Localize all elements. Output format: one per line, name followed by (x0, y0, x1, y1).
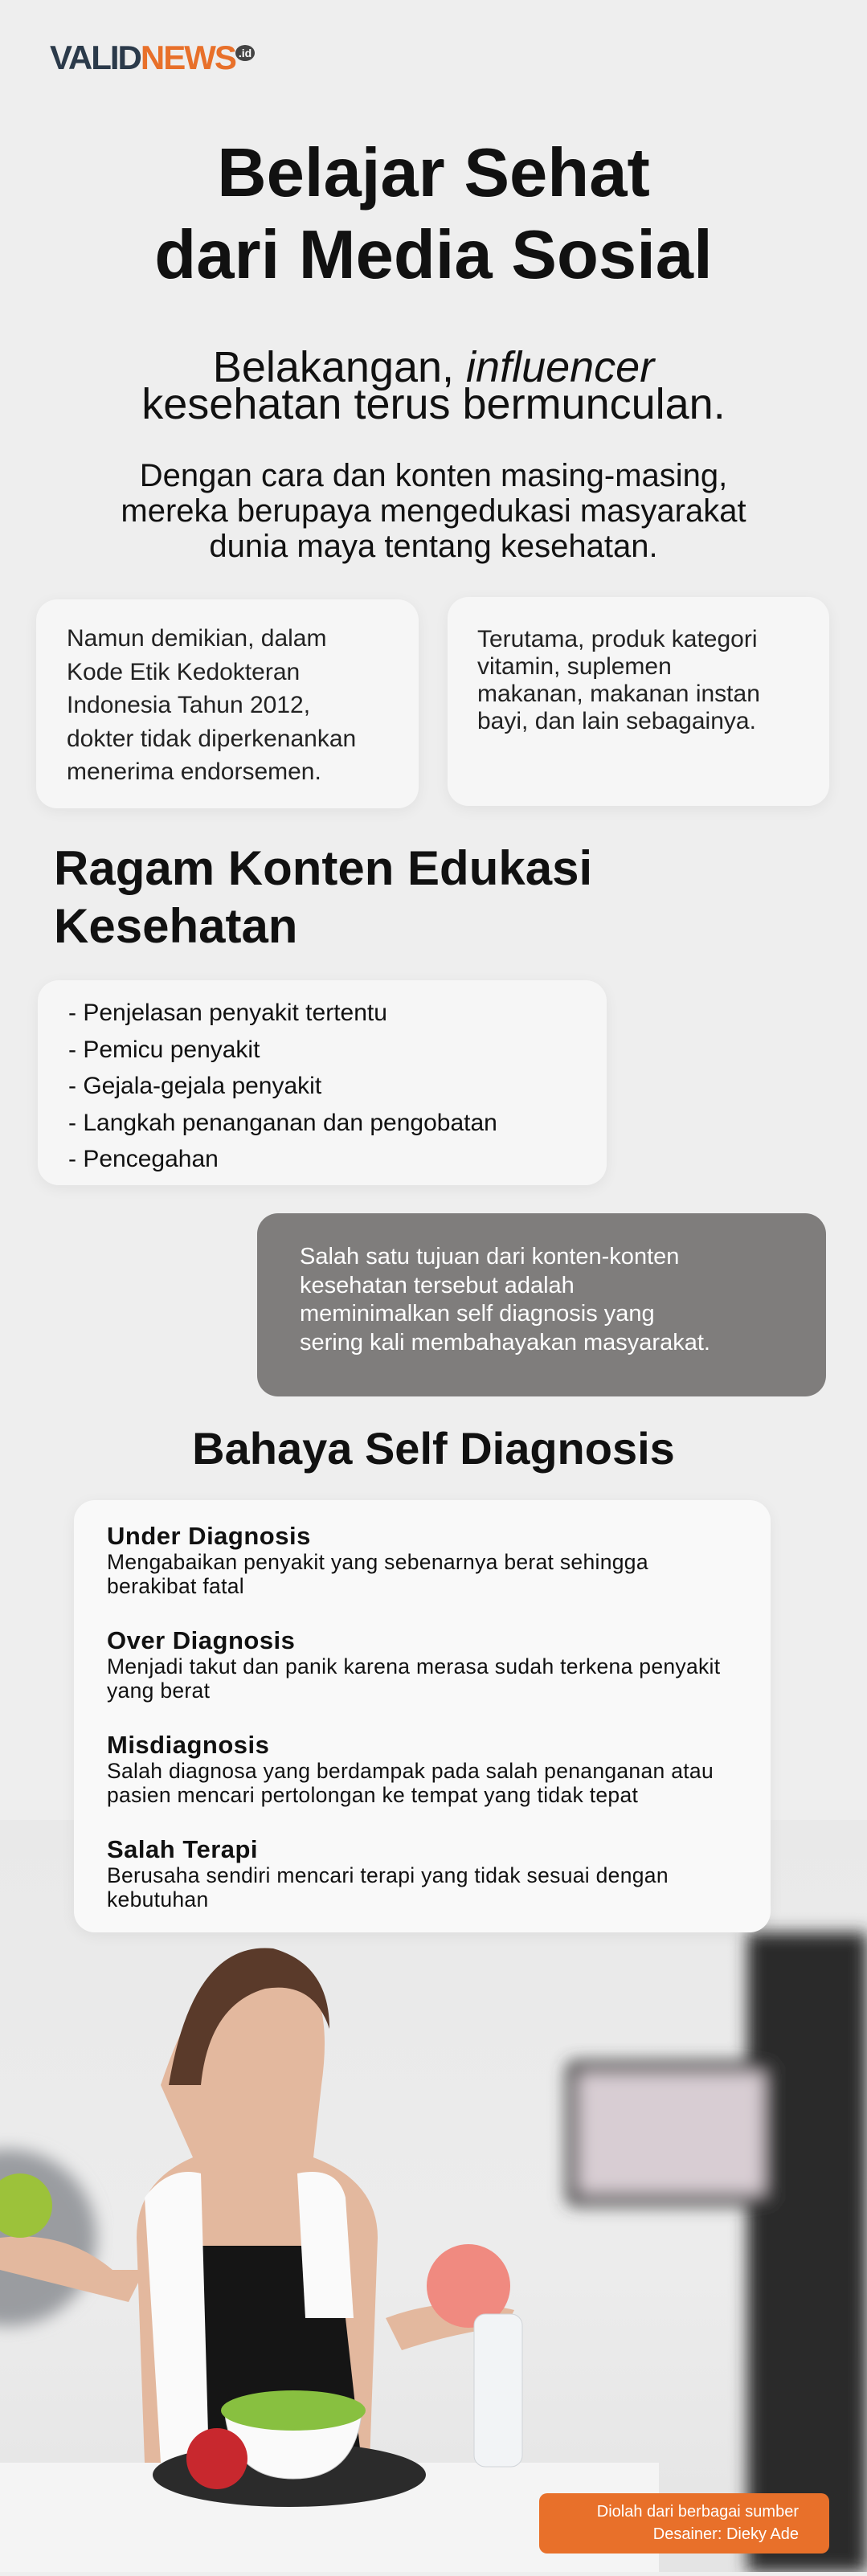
box: produk: Terutama, produk kategori (477, 626, 758, 652)
list box (38, 980, 607, 1185)
ball (0, 2149, 96, 2326)
subtitle: kesehatan terus bermunculan. (141, 380, 726, 428)
gray callout (257, 1213, 826, 1396)
box: kode etik: Indonesia Tahun 2012, (67, 692, 310, 718)
gray callout: meminimalkan self diagnosis yang (300, 1301, 655, 1327)
box: kode etik: Kode Etik Kedokteran (67, 659, 300, 685)
list box: - Gejala-gejala penyakit (68, 1073, 321, 1099)
item: salah terapi: Berusaha sendiri mencari terapi yang tidak sesuai dengan (107, 1863, 669, 1887)
item: misdiagnosis: Misdiagnosis (107, 1731, 269, 1759)
gray callout: kesehatan tersebut adalah (300, 1273, 575, 1298)
item: under diagnosis: berakibat fatal (107, 1574, 244, 1598)
list box: - Langkah penanganan dan pengobatan (68, 1109, 497, 1136)
item: under diagnosis (107, 1522, 648, 1598)
box: kode etik: dokter tidak diperkenankan (67, 725, 356, 752)
card: dangers (74, 1500, 771, 1932)
item: misdiagnosis: Salah diagnosa yang berdampak pada salah penanganan atau (107, 1759, 714, 1783)
intro paragraph: Dengan cara dan konten masing-masing, (140, 458, 727, 493)
item: misdiagnosis: pasien mencari pertolongan ke tempat yang tidak tepat (107, 1783, 638, 1807)
subtitle: Belakangan, influencer (213, 343, 654, 391)
woman (137, 1955, 378, 2463)
heading: ragam konten: Ragam Konten Edukasi (54, 841, 592, 895)
item: over diagnosis (107, 1626, 720, 1703)
item: misdiagnosis (107, 1731, 714, 1807)
table (0, 2463, 659, 2572)
item: salah terapi (107, 1835, 669, 1912)
gray callout: sering kali membahayakan masyarakat. (300, 1329, 710, 1355)
heading: ragam konten (54, 841, 592, 953)
box: produk (448, 597, 829, 806)
credit badge: Desainer: Dieky Ade (653, 2525, 799, 2543)
list box: - Penjelasan penyakit tertentu (68, 1000, 387, 1026)
heading: bahaya self diagnosis: Bahaya Self Diagnosis (192, 1423, 675, 1474)
title: dari Media Sosial (154, 217, 713, 293)
item: over diagnosis: yang berat (107, 1678, 210, 1703)
title (154, 135, 713, 293)
box: produk: bayi, dan lain sebagainya. (477, 708, 756, 734)
item: under diagnosis: Under Diagnosis (107, 1522, 311, 1550)
intro paragraph: mereka berupaya mengedukasi masyarakat (121, 493, 746, 529)
gray callout: Salah satu tujuan dari konten-konten (300, 1244, 679, 1270)
list box: - Pemicu penyakit (68, 1037, 260, 1062)
intro paragraph (121, 458, 746, 564)
photo background (0, 1820, 867, 2572)
item: salah terapi: kebutuhan (107, 1887, 208, 1912)
box: produk: vitamin, suplemen (477, 653, 672, 680)
item: salah terapi: Salah Terapi (107, 1835, 258, 1863)
box: kode etik: Namun demikian, dalam (67, 625, 326, 652)
credit badge: Diolah dari berbagai sumber (597, 2503, 799, 2521)
subtitle (141, 343, 726, 428)
camera blur (566, 1932, 867, 2572)
item: over diagnosis: Over Diagnosis (107, 1626, 295, 1654)
title: Belajar Sehat (217, 135, 650, 211)
list box: - Pencegahan (68, 1146, 219, 1172)
box: produk: makanan, makanan instan (477, 681, 760, 707)
intro paragraph: dunia maya tentang kesehatan. (209, 529, 658, 564)
credit badge (539, 2493, 829, 2554)
item: over diagnosis: Menjadi takut dan panik karena merasa sudah terkena penyakit (107, 1654, 720, 1678)
item: under diagnosis: Mengabaikan penyakit yang sebenarnya berat sehingga (107, 1550, 648, 1574)
box: kode etik: menerima endorsemen. (67, 758, 321, 785)
box: kode etik (36, 599, 419, 808)
heading: ragam konten: Kesehatan (54, 899, 297, 953)
logo: VALIDNEWS .id (50, 39, 252, 76)
